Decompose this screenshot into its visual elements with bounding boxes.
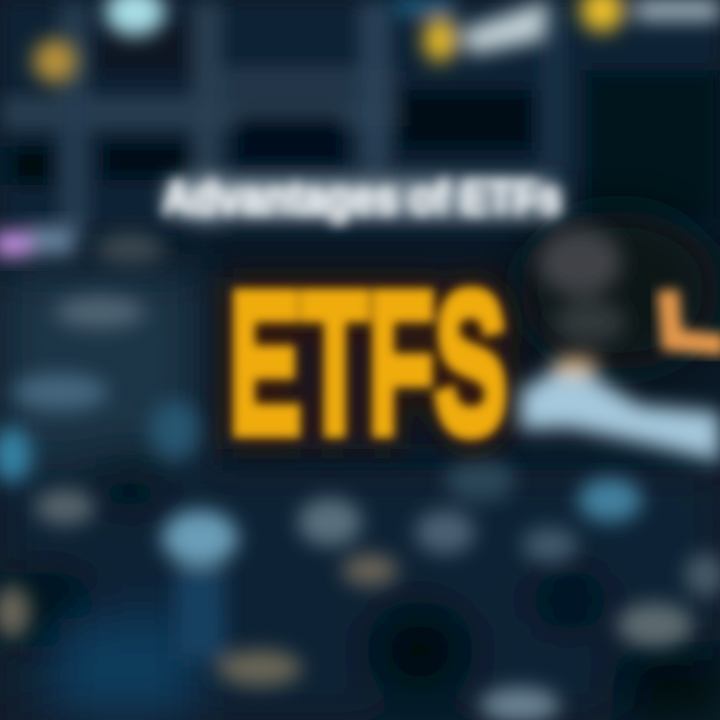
icon: yellow coin top left bbox=[33, 39, 77, 83]
heading: Advantages of ETFs: Advantages of ETFs bbox=[162, 172, 562, 225]
icon: yellow coin top right with light bar bbox=[580, 0, 720, 32]
background: dark building grid bbox=[0, 0, 720, 240]
icon: glowing teal orb top left bbox=[105, 0, 165, 36]
background: blurred crowd figures bbox=[0, 228, 720, 720]
orange arrow right bbox=[668, 290, 720, 345]
heading glow bbox=[165, 178, 560, 218]
violet side label bbox=[0, 226, 74, 256]
lower crowd base tones bbox=[0, 210, 720, 720]
hand / light swoosh right bbox=[520, 357, 720, 462]
chart: top swoosh with yellow accent bbox=[395, 0, 548, 62]
